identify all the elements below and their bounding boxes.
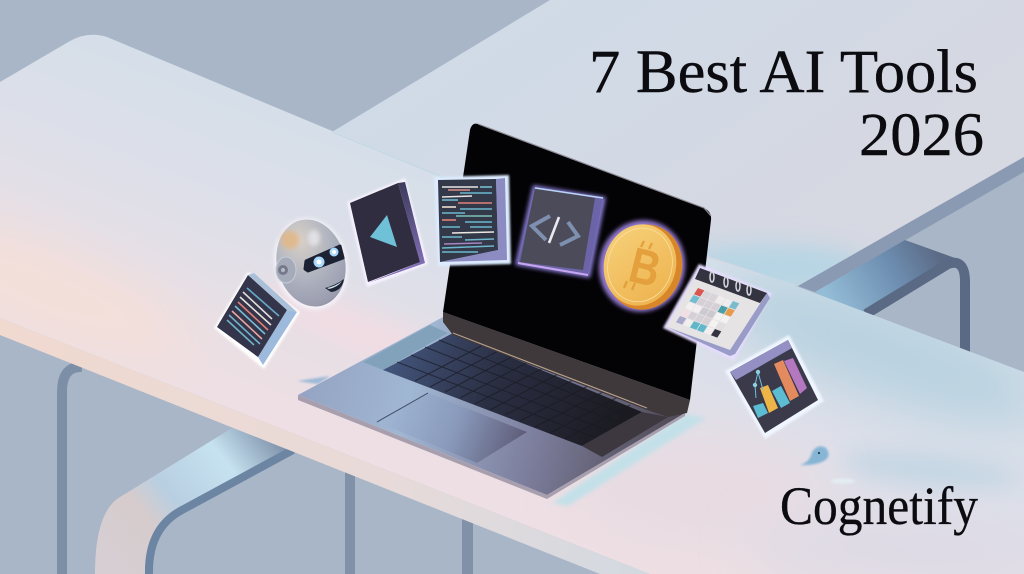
laptop screen bbox=[443, 124, 711, 417]
icon: bar chart card bbox=[725, 335, 824, 439]
icon: robot head bbox=[265, 211, 357, 317]
laptop base bbox=[298, 317, 685, 499]
keyboard bbox=[383, 333, 642, 446]
code brackets bbox=[532, 216, 578, 245]
robot visor with eyes bbox=[305, 246, 343, 271]
title line 2: 2026 bbox=[859, 102, 984, 169]
speaker panel bbox=[363, 325, 448, 370]
calendar date grid bbox=[676, 288, 739, 338]
icon: calendar bbox=[663, 264, 772, 361]
title line 1: 7 Best AI Tools bbox=[589, 39, 978, 106]
front table legs bbox=[62, 367, 473, 574]
icon: bitcoin coin: B bbox=[624, 237, 666, 298]
bars bbox=[753, 358, 807, 418]
icon: bitcoin coin bbox=[589, 210, 695, 322]
icon: small bird logo bbox=[800, 446, 855, 484]
title bbox=[589, 39, 984, 169]
right dark panel bbox=[582, 412, 668, 457]
right table leg bbox=[815, 240, 965, 352]
robot ear bbox=[276, 257, 296, 283]
icon: code document bbox=[434, 175, 511, 266]
icon: play card bbox=[347, 178, 428, 287]
icon: code card (left) bbox=[214, 272, 300, 369]
icon: code tag card bbox=[515, 185, 606, 278]
brand name: Cognetify bbox=[780, 476, 978, 536]
back table bbox=[332, 0, 1024, 292]
trackpad bbox=[377, 393, 527, 463]
laptop bbox=[297, 124, 711, 506]
laptop shadow bbox=[297, 376, 706, 506]
